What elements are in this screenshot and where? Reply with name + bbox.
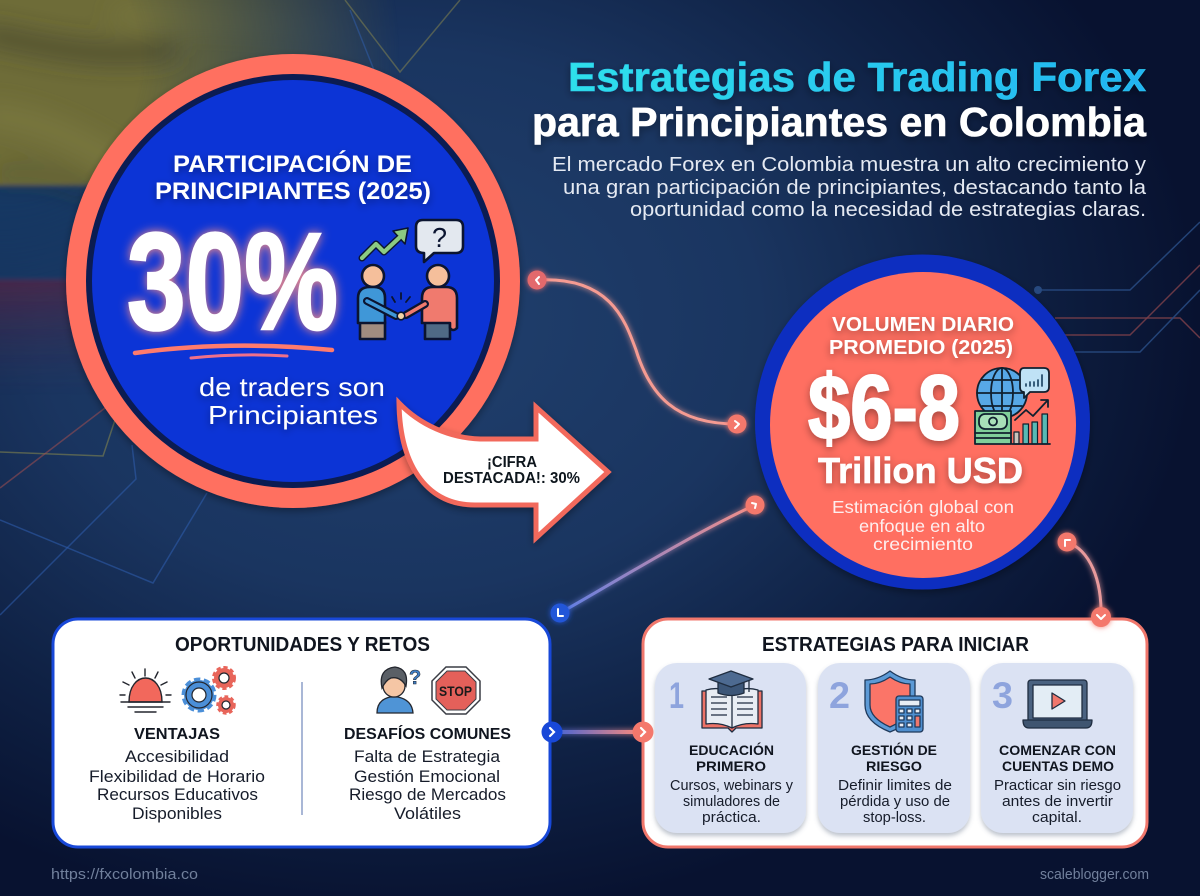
card 2 text: stop-loss. [863, 810, 926, 826]
title [532, 54, 1147, 145]
card 2 heading: RIESGO [866, 758, 922, 774]
icon: confused person with headset [377, 667, 421, 713]
blue fill [92, 80, 494, 482]
advantages list: Accesibilidad [125, 747, 229, 766]
card 1: 1 [669, 675, 684, 716]
icon: confused person with headset: ? [409, 667, 421, 689]
advantages list [89, 747, 265, 823]
challenges list [349, 747, 506, 823]
coral ring [66, 54, 520, 508]
panel: strategies to start [643, 619, 1147, 847]
challenges heading: DESAFÍOS COMUNES [344, 724, 511, 743]
dark ring [86, 74, 500, 488]
circle heading [829, 314, 1014, 359]
footer url right: scaleblogger.com [1040, 866, 1149, 883]
advantages list: Recursos Educativos [97, 785, 258, 804]
footer url left: https://fxcolombia.co [51, 866, 198, 883]
icon: laptop with play button [1023, 680, 1092, 728]
card 2 heading [851, 741, 937, 774]
title: Estrategias de Trading Forex [568, 54, 1146, 100]
circle heading: PARTICIPACIÓN DE [173, 150, 412, 178]
caption: de traders son [199, 372, 385, 402]
card 3: 3 [992, 675, 1013, 716]
card 1 heading [689, 741, 774, 774]
panel heading: OPORTUNIDADES Y RETOS [175, 634, 430, 656]
card 2 [818, 663, 970, 833]
card 3 heading: COMENZAR CON [999, 742, 1116, 758]
callout text [443, 454, 580, 487]
card 1 text: práctica. [702, 810, 761, 826]
card 1 heading: PRIMERO [696, 758, 766, 774]
big number 30%: 30% [127, 205, 338, 359]
blue ring [755, 254, 1090, 590]
panel: opportunities and challenges [53, 619, 550, 847]
advantages heading: VENTAJAS [134, 726, 220, 743]
card 1 heading: EDUCACIÓN [689, 741, 774, 758]
callout text: ¡CIFRA [487, 454, 537, 471]
big number: $6-8 [808, 357, 960, 459]
card 3 [981, 663, 1133, 833]
subtitle paragraph: oportunidad como la necesidad de estrategias claras. [630, 199, 1146, 221]
challenges list: Gestión Emocional [354, 767, 500, 786]
callout arrow [399, 403, 608, 538]
card 1 text: Cursos, webinars y [670, 778, 794, 794]
card 3 heading [999, 742, 1116, 774]
circle heading [155, 150, 431, 205]
card 2: 2 [829, 675, 850, 716]
circle heading: PROMEDIO (2025) [829, 337, 1013, 359]
card 1 [655, 663, 806, 833]
icon: sunrise [120, 669, 171, 712]
icon: handshake with growth arrow and question bubble: ? [432, 222, 447, 253]
underline swoosh [135, 346, 332, 358]
subtitle paragraph [552, 154, 1147, 221]
connectors [537, 280, 1101, 617]
advantages list: Disponibles [132, 804, 222, 823]
unit: Trillion USD [818, 450, 1023, 491]
challenges list: Falta de Estrategia [354, 747, 501, 766]
panel: participation circle [66, 54, 520, 508]
card 3 heading: CUENTAS DEMO [1002, 758, 1114, 774]
connector nodes [528, 270, 1111, 627]
description: Estimación global con [832, 497, 1014, 517]
card 3 text: Practicar sin riesgo [994, 778, 1121, 794]
subtitle paragraph: El mercado Forex en Colombia muestra un alto crecimiento y [552, 154, 1146, 176]
card 1 text [670, 778, 794, 826]
description: enfoque en alto [859, 516, 985, 536]
card 2 heading: GESTIÓN DE [851, 741, 937, 758]
description [832, 497, 1014, 554]
background flag of Colombia [0, 0, 373, 356]
caption: Principiantes [208, 400, 378, 430]
circle heading: PRINCIPIANTES (2025) [155, 178, 431, 205]
card 3 text: capital. [1032, 810, 1082, 826]
arrow between panels [542, 722, 654, 742]
advantages list: Flexibilidad de Horario [89, 767, 265, 786]
challenges list: Volátiles [394, 804, 461, 823]
panel frame [643, 619, 1147, 847]
coral fill [770, 272, 1076, 578]
panel heading: ESTRATEGIAS PARA INICIAR [762, 634, 1030, 656]
caption [199, 372, 385, 430]
panel frame [53, 619, 550, 847]
card 3 text [994, 778, 1121, 826]
challenges list: Riesgo de Mercados [349, 785, 506, 804]
card 2 text: pérdida y uso de [840, 794, 950, 810]
title: para Principiantes en Colombia [532, 99, 1147, 145]
circle heading: VOLUMEN DIARIO [832, 314, 1014, 336]
subtitle paragraph: una gran participación de principiantes, destacando tanto la [563, 177, 1147, 199]
icon: stop sign: STOP [439, 683, 472, 699]
card 2 text [838, 778, 952, 826]
panel: daily volume circle [755, 254, 1090, 590]
card 2 text: Definir limites de [838, 778, 952, 794]
background circuit lines [0, 0, 1200, 615]
callout text: DESTACADA!: 30% [443, 470, 580, 487]
card 1 text: simuladores de [683, 794, 780, 810]
icon: shield and calculator [865, 671, 923, 732]
icon: gears [184, 668, 234, 713]
icon: book and graduation cap [702, 671, 762, 732]
description: crecimiento [873, 534, 973, 554]
icon: stop sign [432, 667, 480, 714]
icon: handshake with growth arrow and question bubble [358, 220, 463, 339]
icon: globe, money and chart [975, 368, 1050, 444]
card 3 text: antes de invertir [1002, 794, 1113, 810]
